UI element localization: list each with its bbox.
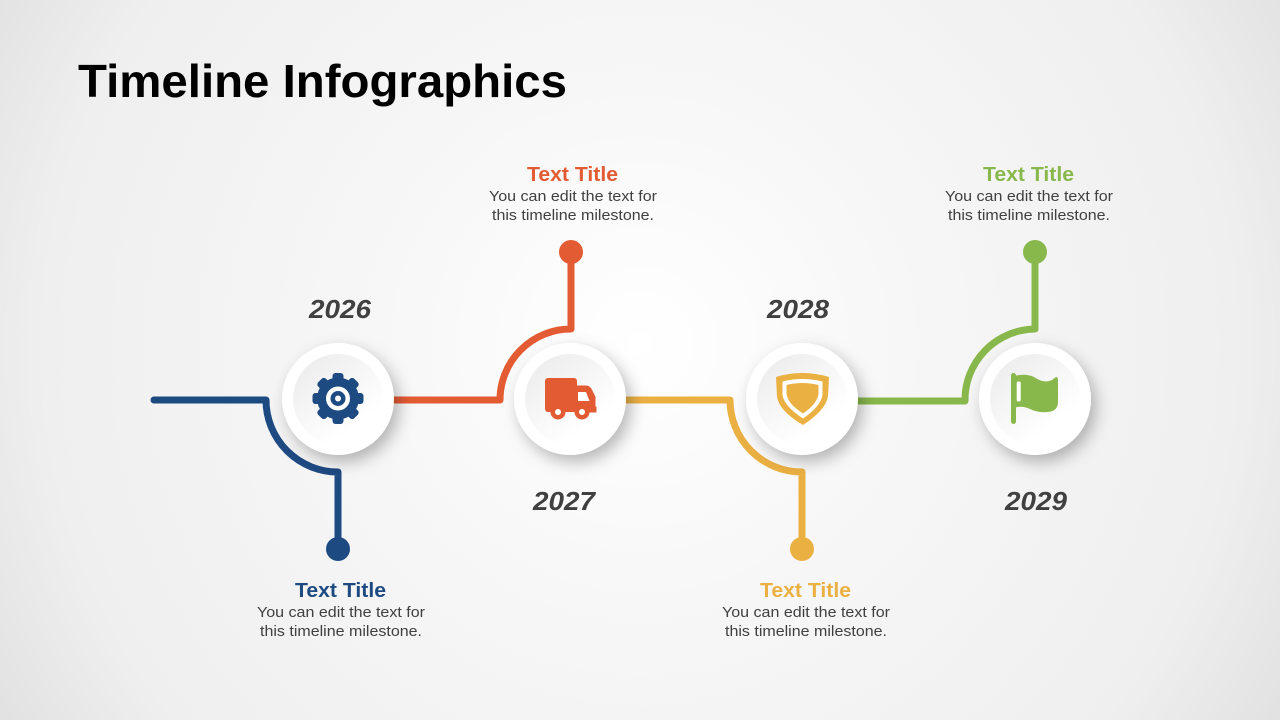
heading: red: Text Title: [527, 164, 618, 186]
connector: blue: [154, 400, 338, 549]
text block: yellow milestone: [722, 580, 890, 640]
text block: yellow milestone: this timeline milestone.: [725, 623, 887, 640]
year 2026: 2026: [308, 294, 372, 324]
connector: yellow: [622, 400, 802, 549]
connector dot: green: [1023, 240, 1047, 264]
text block: green milestone: [945, 164, 1113, 224]
description: yellow: You can edit the text for: [722, 604, 890, 621]
milestone 2029 node: [979, 343, 1091, 455]
text block: red milestone: [489, 164, 657, 224]
heading: blue: Text Title: [295, 580, 386, 602]
text block: green milestone: this timeline milestone.: [948, 207, 1110, 224]
milestone 2026 node: [282, 343, 394, 455]
connector: red: [390, 252, 571, 400]
title: Timeline Infographics: [78, 55, 567, 107]
year 2027: 2027: [532, 486, 597, 516]
icon: flag: [1011, 373, 1058, 424]
connector dot: red: [559, 240, 583, 264]
description: red: You can edit the text for: [489, 188, 657, 205]
text block: blue milestone: [257, 580, 425, 640]
text block: blue milestone: this timeline milestone.: [260, 623, 422, 640]
milestone 2027 node: [514, 343, 626, 455]
connector: green: [854, 252, 1035, 401]
description: green: You can edit the text for: [945, 188, 1113, 205]
year 2029: 2029: [1004, 486, 1068, 516]
description: blue: You can edit the text for: [257, 604, 425, 621]
milestone 2028 node: [746, 343, 858, 455]
icon: truck: [545, 378, 596, 420]
connector dot: yellow: [790, 537, 814, 561]
heading: yellow: Text Title: [760, 580, 851, 602]
year 2028: 2028: [766, 294, 830, 324]
connector dot: blue: [326, 537, 350, 561]
text block: red milestone: this timeline milestone.: [492, 207, 654, 224]
icon: shield: [776, 373, 829, 425]
icon: gear: [312, 373, 364, 424]
heading: green: Text Title: [983, 164, 1074, 186]
